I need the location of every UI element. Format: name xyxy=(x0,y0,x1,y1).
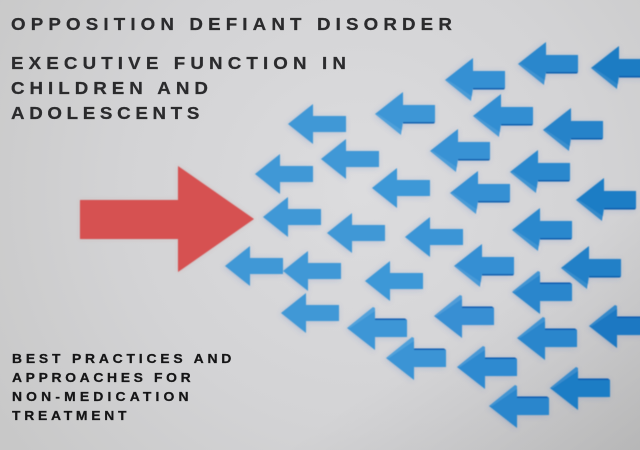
heading: Executive Function in Children and Adolescents xyxy=(11,54,346,123)
blue arrow 28 xyxy=(347,307,407,350)
blue arrow 13 xyxy=(576,178,636,221)
blue arrow 14 xyxy=(450,171,510,214)
blue arrow 16 xyxy=(327,213,385,253)
blue arrow 21 xyxy=(454,244,514,287)
blue arrow 24 xyxy=(512,271,572,314)
blue arrows pointing left xyxy=(225,42,640,428)
blue arrow 17 xyxy=(405,217,463,257)
blue arrow 30 xyxy=(386,337,446,380)
blue arrow 1 xyxy=(288,104,346,144)
blue arrow 32 xyxy=(550,367,610,410)
blue arrow 12 xyxy=(510,150,570,193)
subtitle: Best Practices and Approaches for Non-Medication Treatment: BEST PRACTICES AND xyxy=(12,351,232,366)
blue arrow 3 xyxy=(445,58,505,101)
heading: Executive Function in Children and Adolescents: ADOLESCENTS xyxy=(11,104,199,123)
blue arrow 23 xyxy=(365,261,423,301)
blue arrow 33 xyxy=(489,385,549,428)
heading: Executive Function in Children and Adolescents: CHILDREN AND xyxy=(11,79,208,98)
blue arrow 27 xyxy=(589,305,640,348)
blue arrow 10 xyxy=(255,154,313,194)
blue arrow 22 xyxy=(561,246,621,289)
blue arrow 29 xyxy=(517,317,577,360)
icon: large red arrow pointing right xyxy=(80,166,254,272)
blue arrow 2 xyxy=(375,92,435,135)
blue arrow 20 xyxy=(283,251,341,291)
blue arrow 6 xyxy=(473,94,533,137)
blue arrow 31 xyxy=(457,346,517,389)
blue arrow 8 xyxy=(321,139,379,179)
subtitle: Best Practices and Approaches for Non-Medication Treatment xyxy=(12,351,232,423)
blue arrow 18 xyxy=(512,208,572,251)
blue arrow 7 xyxy=(543,108,603,151)
blue arrow 4 xyxy=(518,42,578,85)
blue arrow 25 xyxy=(281,293,339,333)
blue arrow 26 xyxy=(434,295,494,338)
blue arrow 9 xyxy=(430,129,490,172)
blue arrow 15 xyxy=(263,197,321,237)
subtitle: Best Practices and Approaches for Non-Medication Treatment: NON-MEDICATION xyxy=(12,389,189,404)
heading: Executive Function in Children and Adolescents: EXECUTIVE FUNCTION IN xyxy=(11,54,346,73)
blue arrow 5 xyxy=(591,46,640,89)
blue arrow 19 xyxy=(225,246,283,286)
subtitle: Best Practices and Approaches for Non-Medication Treatment: TREATMENT xyxy=(12,408,127,423)
title: Opposition Defiant Disorder: OPPOSITION DEFIANT DISORDER xyxy=(11,15,452,34)
blue arrow 11 xyxy=(372,168,430,208)
subtitle: Best Practices and Approaches for Non-Medication Treatment: APPROACHES FOR xyxy=(12,370,191,385)
